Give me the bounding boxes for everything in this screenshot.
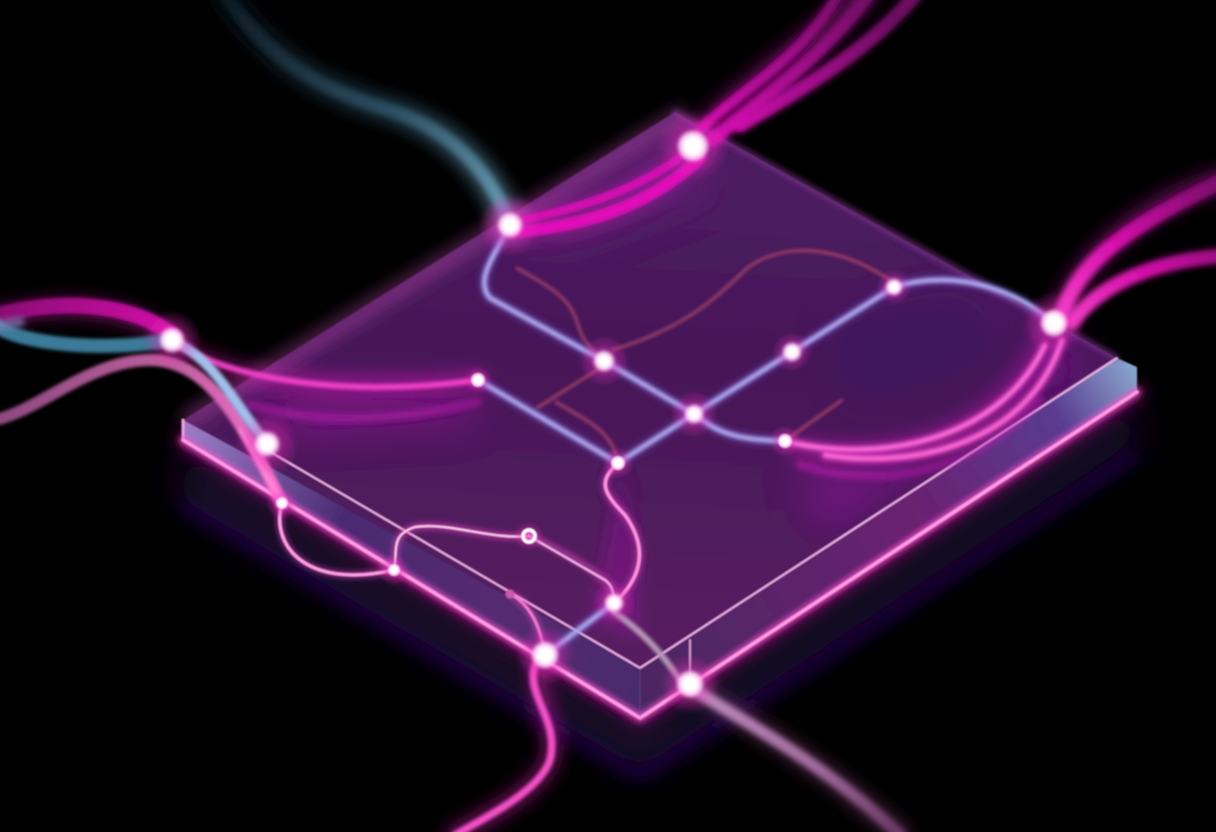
faint brown traces xyxy=(517,251,890,462)
plate: right side face xyxy=(640,358,1137,718)
plate: left side face xyxy=(183,420,640,718)
plate shadow and reflection xyxy=(183,400,1137,775)
blue-lilac circuit lines xyxy=(478,225,1054,655)
plate outer glow xyxy=(183,392,1137,718)
bottom mauve strand xyxy=(614,612,900,832)
thin white-pink wires xyxy=(280,463,639,655)
right magenta bundle xyxy=(785,180,1216,459)
reflections on plate xyxy=(250,400,1040,476)
glowing nodes xyxy=(142,110,1086,714)
top magenta strands xyxy=(510,0,915,232)
top-left blue strand xyxy=(225,0,510,225)
icon: small stub dot xyxy=(506,590,514,598)
bottom magenta strand xyxy=(455,655,552,832)
plate: top face shading xyxy=(240,150,1090,640)
left strands xyxy=(0,306,478,503)
plate: top face xyxy=(183,112,1117,668)
plate: rim lines xyxy=(183,112,1137,718)
